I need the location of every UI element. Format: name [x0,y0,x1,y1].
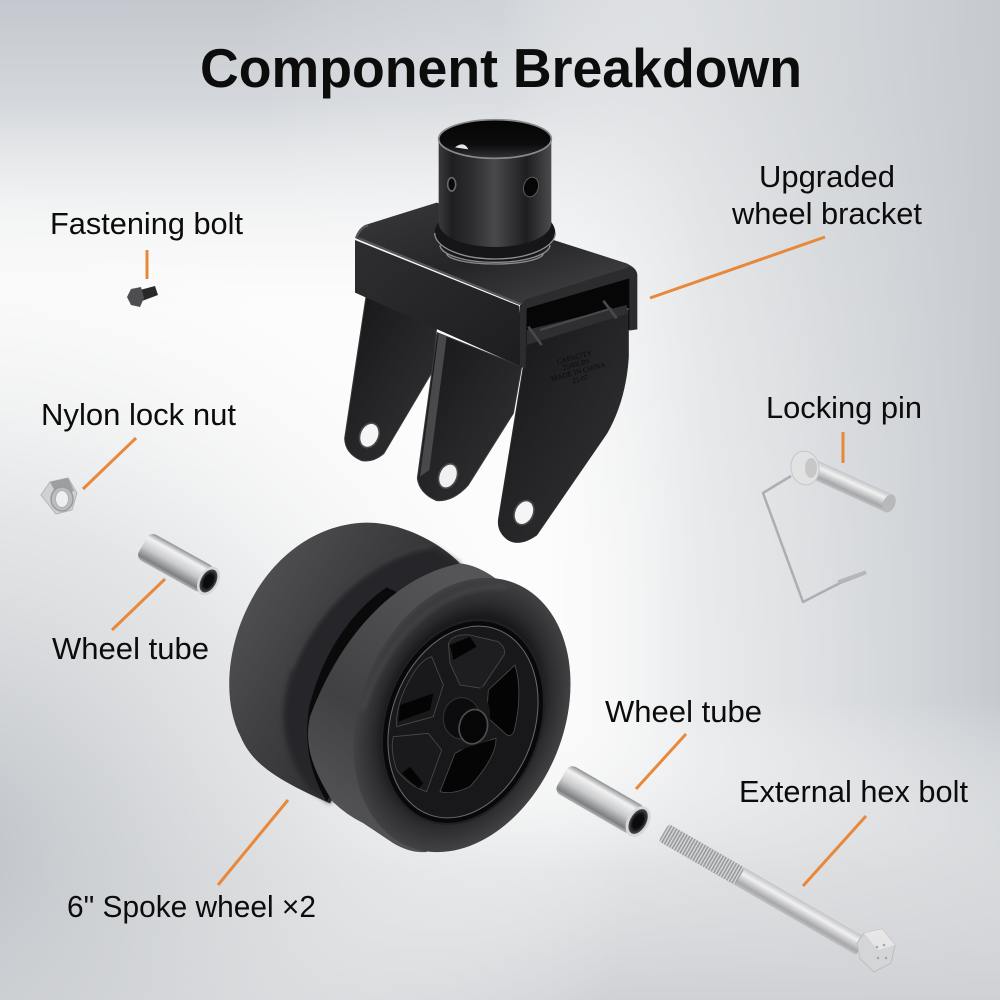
pin wire [763,476,866,602]
housing front face [355,240,525,368]
label: locking pin: Locking pin [766,390,922,425]
plate stamp [546,345,609,391]
label: left wheel tube: Wheel tube [52,631,209,666]
collar rings [440,245,550,264]
icon: nylon lock nut [41,478,77,514]
housing side lip [520,267,637,368]
plate stamp: 25.07 [571,372,590,385]
window interior shadows [398,637,477,788]
front wheel tire face [314,545,610,885]
middle leg hole [435,461,461,491]
housing edge highlights [356,225,520,304]
tube body [439,139,551,247]
hinge bar [527,305,628,345]
icon: locking pin [763,449,898,602]
window upper left [397,657,443,727]
label: right wheel tube: Wheel tube [605,694,762,729]
front wheel cylinder [308,563,510,852]
label: upgraded wheel bracket: wheel bracket [731,196,922,231]
rear leg hole [356,420,383,451]
label: spoke wheel: 6" Spoke wheel ×2 [67,889,316,924]
leader lines [83,237,866,886]
plate stamp: 2500LBS [561,356,591,372]
collar [435,203,555,263]
icon: left wheel tube [135,531,225,599]
window right [487,665,519,735]
tube side holes [521,175,541,199]
label: upgraded wheel bracket [731,159,922,231]
window bottom [440,738,496,793]
rim windows [392,635,519,793]
housing top face [356,203,635,305]
title: Component Breakdown [200,37,802,99]
hub [443,687,490,750]
middle leg edge highlight [420,333,447,477]
label: fastening bolt: Fastening bolt [50,206,243,241]
middle leg [417,333,522,501]
plate stamp: CAPACITY [556,348,594,366]
tube rim [439,120,551,158]
front leg hole [510,497,538,528]
bolt shaft [659,824,866,955]
front leg plate [498,310,628,542]
icon: upgraded wheel bracket [345,120,637,542]
label: upgraded wheel bracket: Upgraded [759,159,895,194]
gap between wheels [307,587,407,802]
hub bore [455,706,491,747]
icon: hex bolt head [857,929,895,972]
tube inner notch [455,144,468,149]
label: nylon lock nut: Nylon lock nut [41,397,236,432]
label: external hex bolt: External hex bolt [739,774,968,809]
back wheel [229,523,460,803]
housing opening [520,270,637,368]
rim [355,597,571,847]
icon: external hex bolt [659,824,866,955]
icon: spoke wheels [229,523,610,885]
icon: fastening bolt [127,286,158,307]
icon: right wheel tube [554,763,656,841]
plate stamp: MADE IN CHINA [550,360,607,383]
rim edge [362,605,564,839]
rear leg [345,297,437,461]
bolt threads [659,824,745,885]
window top [448,635,505,688]
pin head [788,449,822,487]
pin shaft [805,458,898,515]
back wheel shoulder [283,546,460,803]
window lower left [392,733,442,792]
